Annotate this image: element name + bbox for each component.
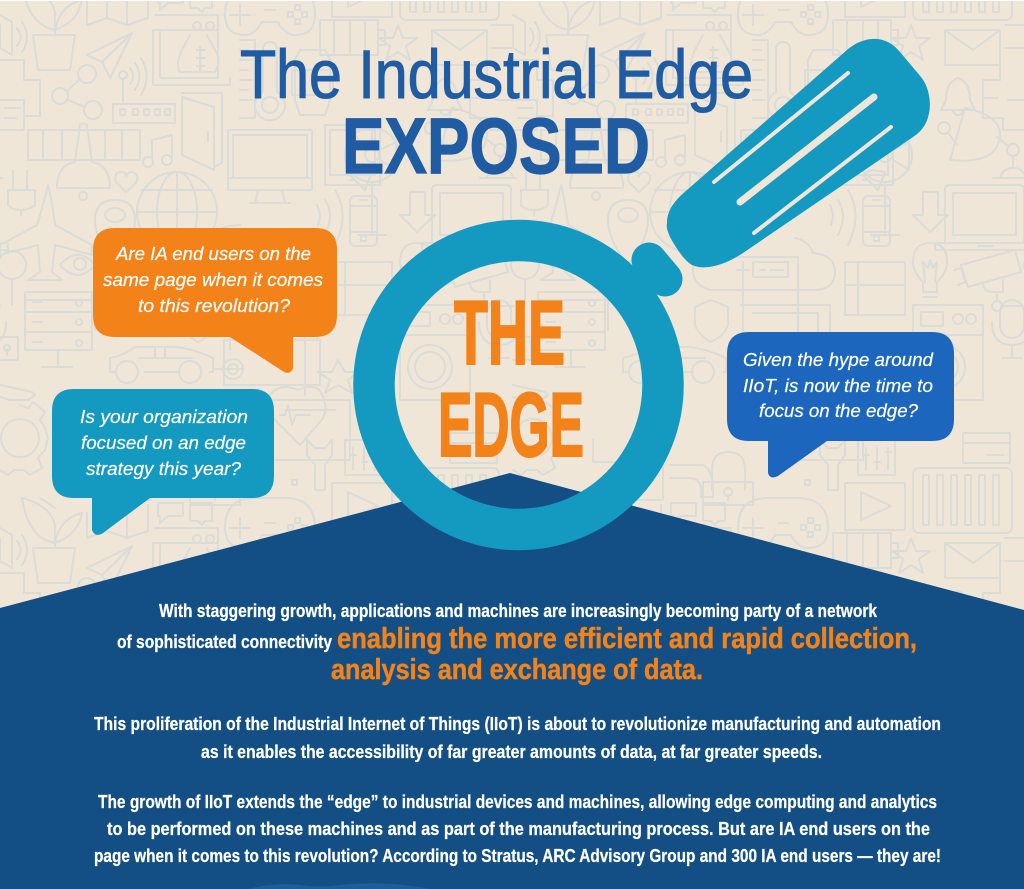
intro text with highlight: enabling the more efficient and rapid collection, bbox=[337, 623, 917, 655]
title line: The Industrial Edge: The Industrial Edge bbox=[240, 36, 753, 113]
paragraph: growth of IIoT bbox=[94, 791, 941, 866]
lens heading: THE EDGE bbox=[438, 283, 584, 476]
paragraph: IIoT proliferation bbox=[94, 713, 941, 762]
speech bubble: teal: Is your organization bbox=[80, 406, 248, 427]
speech bubble: orange bbox=[93, 228, 337, 373]
magnifying glass bbox=[374, 39, 930, 529]
paragraph: IIoT proliferation: as it enables the accessibility of far greater amounts of data, at far greater speeds. bbox=[201, 741, 822, 762]
intro text with highlight bbox=[117, 600, 917, 686]
top edge strip bbox=[0, 0, 1024, 1]
speech bubble: blue: Given the hype around bbox=[743, 349, 934, 370]
intro text with highlight: analysis and exchange of data. bbox=[331, 654, 703, 686]
title bbox=[240, 36, 753, 190]
lens ring bbox=[374, 240, 663, 530]
connector knob bbox=[649, 260, 665, 279]
navy peaked panel bbox=[0, 473, 1024, 889]
speech bubble: blue: IIoT, is now the time to bbox=[743, 375, 933, 396]
speech bubble: blue: focus on the edge? bbox=[759, 400, 919, 421]
speech bubble: teal: strategy this year? bbox=[86, 458, 242, 479]
speech bubble: orange: to this revolution? bbox=[138, 295, 291, 316]
speech bubble: teal: focused on an edge bbox=[81, 432, 246, 453]
speech bubble: orange: same page when it comes bbox=[103, 269, 323, 290]
title line: EXPOSED: EXPOSED bbox=[342, 101, 650, 190]
lens heading: THE EDGE: EDGE bbox=[438, 375, 584, 476]
speech bubble: blue bbox=[727, 332, 954, 477]
lens heading: THE EDGE: THE bbox=[454, 283, 565, 384]
handle bbox=[667, 39, 930, 267]
speech bubble: teal bbox=[52, 389, 274, 535]
intro text with highlight: of sophisticated connectivity bbox=[117, 631, 333, 652]
lighter shape at bottom edge bbox=[248, 883, 430, 889]
speech bubble: orange: Are IA end users on the bbox=[115, 243, 311, 264]
paragraph: growth of IIoT: to be performed on these machines and as part of the manufacturing process. But are IA end users on the bbox=[107, 818, 930, 839]
intro text with highlight: With staggering growth, applications and machines are increasingly becoming party of a network bbox=[159, 600, 878, 621]
